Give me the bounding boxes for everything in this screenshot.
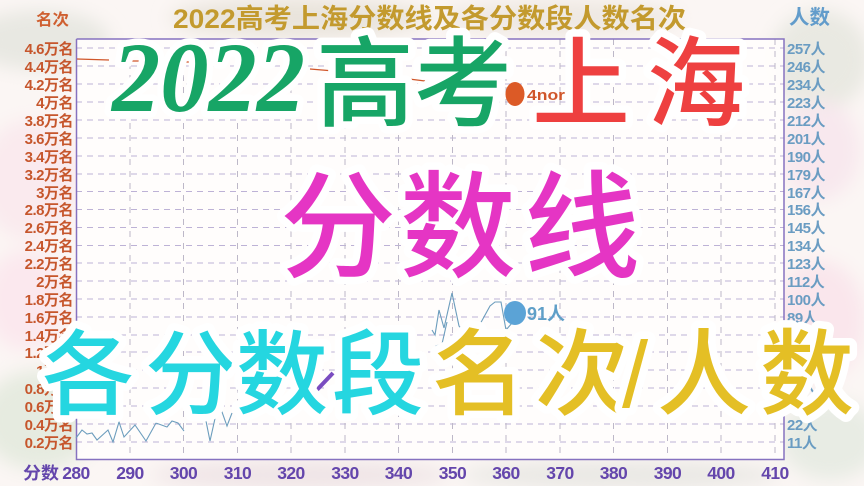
right axis count labels: 190人 [787, 149, 826, 166]
left axis rank labels: 4.6万名 [25, 40, 73, 58]
left axis rank labels: 2万名 [36, 273, 73, 291]
x axis labels: 340 [385, 463, 413, 483]
left axis rank labels: 2.2万名 [25, 255, 73, 273]
left axis rank labels: 3.2万名 [25, 166, 73, 184]
x axis labels: 分数 [23, 464, 59, 483]
left axis rank labels: 1.6万名 [25, 309, 73, 327]
x axis labels: 400 [707, 463, 736, 483]
left axis rank labels: 1.8万名 [25, 291, 73, 309]
right axis count labels: 167人 [787, 185, 826, 202]
right axis count labels: 201人 [787, 131, 826, 148]
headline: 高考: 高考 [316, 29, 512, 139]
right axis count labels: 123人 [787, 256, 826, 273]
right axis count labels: 112人 [787, 274, 825, 291]
x axis labels: 360 [492, 463, 521, 483]
x axis labels: 330 [331, 463, 360, 483]
left axis rank labels: 4.2万名 [25, 76, 73, 94]
title: 2022高考上海分数线及各分数段人数名次 [173, 4, 686, 34]
x axis labels: 410 [761, 463, 790, 483]
right axis count labels [787, 41, 826, 452]
right axis count labels: 45人 [787, 381, 818, 398]
left axis rank labels: 2.8万名 [25, 201, 73, 219]
left axis rank labels: 1.2万名 [25, 344, 73, 362]
headline: 名次/人数: 名次/人数 [432, 322, 854, 427]
left axis rank labels: 4万名 [36, 94, 73, 112]
right axis count labels: 134人 [787, 238, 826, 255]
chart grid [76, 39, 784, 459]
left axis rank labels: 1万名 [36, 362, 73, 380]
right axis count labels: 100人 [787, 292, 826, 309]
right axis count labels: 89人 [787, 310, 818, 327]
right axis count labels: 234人 [787, 77, 826, 94]
left axis rank labels: 3万名 [36, 184, 73, 202]
x axis labels [23, 463, 790, 483]
headline: 2022: 2022 [110, 22, 305, 133]
left axis rank labels: 0.4万名 [25, 416, 73, 434]
left axis rank labels: 3.4万名 [25, 148, 73, 166]
right axis count labels: 246人 [787, 59, 826, 76]
right axis count labels: 156人 [787, 202, 826, 219]
right axis title: 人数 [789, 6, 830, 29]
right axis count labels: 34人 [787, 399, 818, 416]
right axis count labels: 11人 [787, 435, 817, 452]
left axis title: 名次 [36, 11, 69, 29]
count line (blue) [76, 293, 512, 442]
chart axes [76, 39, 784, 460]
right axis count labels: 145人 [787, 220, 826, 237]
left axis rank labels: 0.8万名 [25, 380, 73, 398]
x axis labels: 370 [546, 463, 575, 483]
x axis labels: 390 [654, 463, 682, 483]
left axis rank labels: 2.4万名 [25, 237, 73, 255]
left axis rank labels: 4.4万名 [25, 58, 73, 76]
left axis rank labels: 1.4万名 [25, 327, 73, 345]
left axis rank labels: 0.2万名 [25, 434, 73, 452]
right axis count labels: 223人 [787, 95, 826, 112]
rank marker [506, 82, 524, 106]
headline: 各分数段: 各分数段 [42, 325, 424, 427]
left axis rank labels: 3.6万名 [25, 130, 73, 148]
headline: 上海: 上海 [532, 29, 745, 139]
left axis rank labels: 3.8万名 [25, 112, 73, 130]
x axis labels: 350 [439, 463, 467, 483]
right axis count labels: 257人 [787, 41, 826, 58]
rank value label: 4nor [527, 87, 565, 104]
x axis labels: 310 [224, 463, 252, 483]
left axis rank labels: 0.6万名 [25, 398, 73, 416]
plot area background [76, 39, 784, 459]
x axis labels: 280 [62, 463, 91, 483]
count marker [504, 301, 526, 325]
x axis labels: 290 [116, 463, 145, 483]
x axis labels: 300 [170, 463, 198, 483]
right axis count labels: 67人 [787, 345, 818, 362]
left axis rank labels: 2.6万名 [25, 219, 73, 237]
x axis labels: 380 [600, 463, 628, 483]
x axis labels: 320 [277, 463, 306, 483]
right axis count labels: 56人 [787, 363, 818, 380]
count value label: 91人 [527, 304, 565, 324]
right axis count labels: 22人 [787, 417, 818, 434]
right axis count labels: 179人 [787, 167, 826, 184]
right axis count labels: 78人 [787, 328, 818, 345]
left axis rank labels [25, 40, 73, 452]
right axis count labels: 212人 [787, 113, 826, 130]
headline: 分数线: 分数线 [280, 163, 640, 293]
rank line (orange) [77, 59, 425, 81]
count line fragment (purple) [315, 373, 333, 392]
